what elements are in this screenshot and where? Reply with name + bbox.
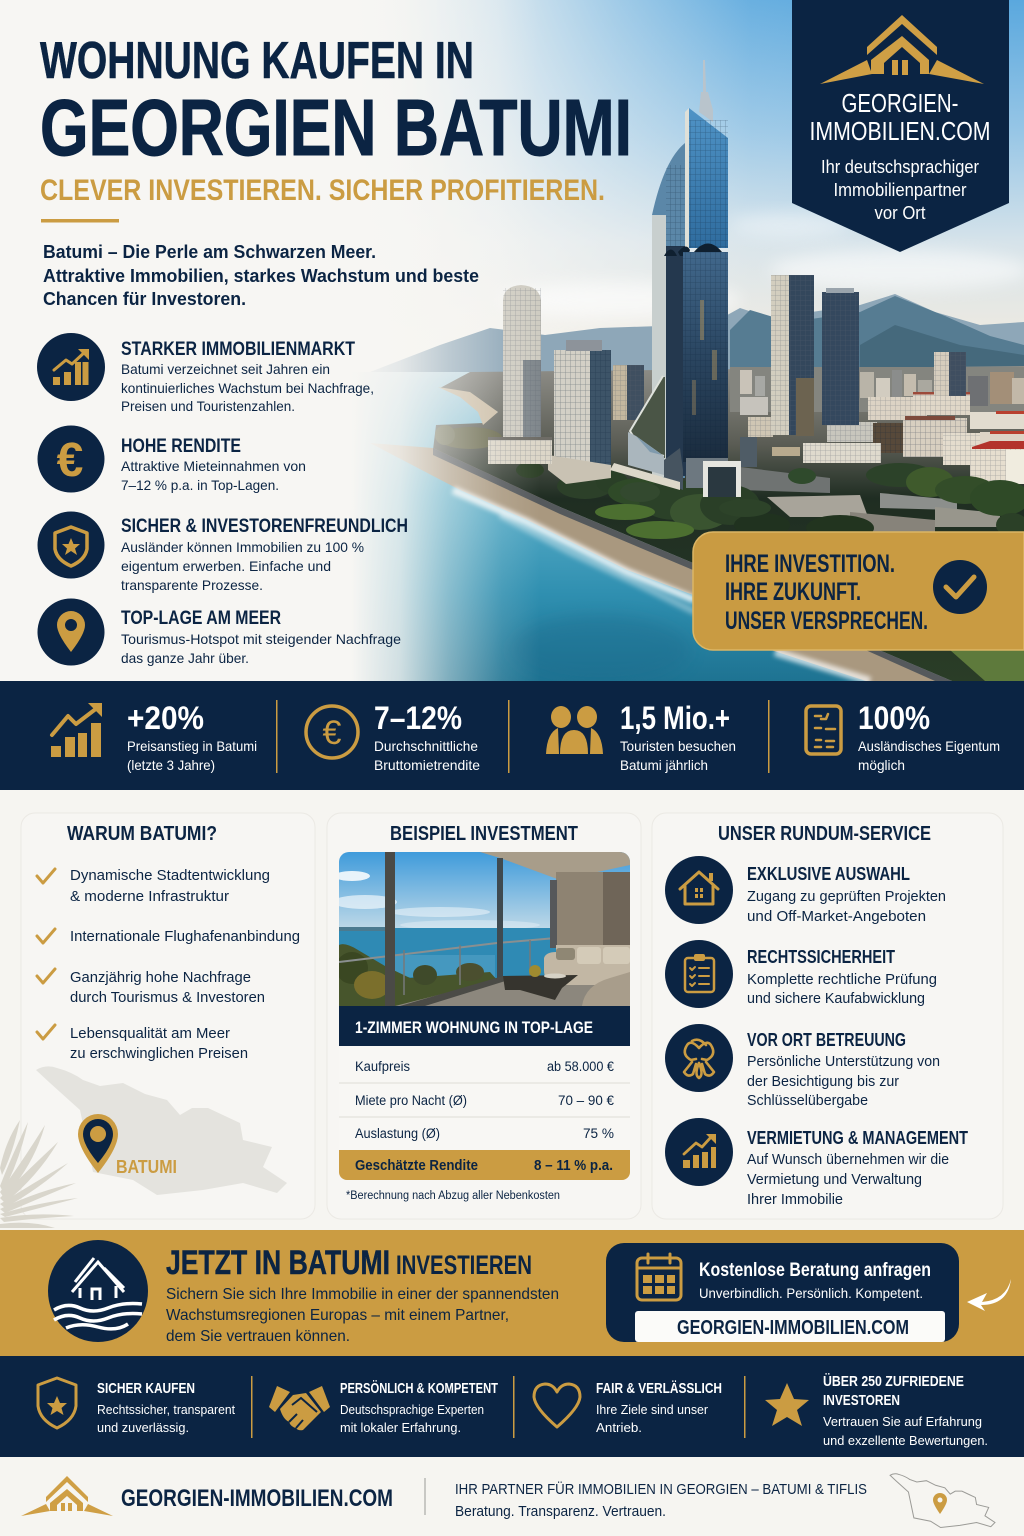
consultation button: Unverbindlich. Persönlich. Kompetent. [699, 1285, 923, 1301]
stat: yield: Bruttomietrendite [374, 757, 480, 773]
service: legal security: und sichere Kaufabwicklung [747, 991, 925, 1007]
hero photo: Batumi skyline and coast [362, 0, 1024, 681]
stat: tourists: Touristen besuchen [620, 738, 736, 754]
service: rental and management: Vermietung und Verwaltung [747, 1172, 922, 1188]
check list: Lebensqualität am Meer [70, 1025, 230, 1042]
trust: buy safely [38, 1378, 235, 1435]
logo banner: GEORGIEN- [842, 88, 958, 118]
stat: yield: 7–12% [374, 700, 462, 736]
icon: map pin [78, 1114, 118, 1173]
feature: Top-Lage am Meer: Tourismus-Hotspot mit steigender Nachfrage [121, 631, 401, 647]
stat: foreign ownership: 100% [858, 700, 930, 736]
trust: satisfied investors [765, 1373, 988, 1448]
icon: growth chart [37, 333, 105, 401]
stat: tourists [546, 700, 736, 773]
trust: personal: Deutschsprachige Experten [340, 1402, 484, 1417]
trust band [0, 1356, 1024, 1457]
trees [447, 427, 502, 449]
logo banner: IMMOBILIEN.COM [810, 116, 990, 146]
service: on-site support: VOR ORT BETREUUNG [747, 1030, 906, 1050]
stat: tourists: 1,5 Mio.+ [620, 700, 730, 736]
photo caption bar [339, 1006, 630, 1046]
check list: durch Tourismus & Investoren [70, 989, 265, 1006]
footer: IHR PARTNER FÜR IMMOBILIEN IN GEORGIEN – BATUMI & TIFLIS [455, 1480, 867, 1498]
highlighted row: expected yield: 8 – 11 % p.a. [534, 1158, 613, 1174]
trust: fair: Antrieb. [596, 1420, 642, 1435]
feature: starker Immobilienmarkt: STARKER IMMOBILIENMARKT [121, 339, 355, 360]
panel: Unser Rundum-Service: UNSER RUNDUM-SERVICE [718, 823, 931, 845]
call to action band: INVESTIEREN [396, 1250, 532, 1280]
title: WOHNUNG KAUFEN IN [40, 32, 474, 90]
panel: Warum Batumi [0, 813, 315, 1228]
check list: & moderne Infrastruktur [70, 888, 229, 905]
feature: starker Immobilienmarkt: Batumi verzeichnet seit Jahren ein [121, 361, 330, 377]
trust: satisfied investors: Vertrauen Sie auf Erfahrung [823, 1414, 982, 1429]
service: rental and management: VERMIETUNG & MANAGEMENT [747, 1128, 968, 1148]
service: exclusive selection [665, 856, 946, 925]
trust: buy safely: und zuverlässig. [97, 1420, 189, 1435]
title: GEORGIEN BATUMI [40, 83, 632, 172]
investment table: Miete pro Nacht (Ø) [355, 1093, 467, 1108]
highlighted row: expected yield [339, 1150, 630, 1180]
stat: price increase [51, 700, 257, 773]
towers [771, 275, 789, 435]
stat: foreign ownership [806, 700, 1000, 773]
service: on-site support: Persönliche Unterstützung von [747, 1054, 940, 1070]
intro text: Chancen für Investoren. [43, 288, 246, 309]
stat: yield: € [323, 714, 342, 752]
feature: hohe Rendite: Attraktive Mieteinnahmen von [121, 458, 306, 474]
feature: Top-Lage am Meer: das ganze Jahr über. [121, 650, 249, 666]
icon: calendar [637, 1254, 681, 1300]
trust: fair: Ihre Ziele sind unser [596, 1402, 709, 1417]
trust: satisfied investors: INVESTOREN [823, 1392, 900, 1409]
check list: Ganzjährig hohe Nachfrage [70, 969, 251, 986]
investment table: ab 58.000 € [547, 1059, 614, 1074]
panel: Warum Batumi: BATUMI [116, 1157, 177, 1177]
photo caption bar: 1-ZIMMER WOHNUNG IN TOP-LAGE [355, 1018, 593, 1037]
trust: buy safely: Rechtssicher, transparent [97, 1402, 235, 1417]
investment table [339, 1046, 630, 1180]
check list: Dynamische Stadtentwicklung [70, 867, 270, 884]
service: legal security: RECHTSSICHERHEIT [747, 947, 895, 967]
palm leaf decoration [0, 1120, 78, 1228]
panel: Unser Rundum-Service [652, 813, 1003, 1219]
icon: check [933, 560, 987, 614]
investment table: Auslastung (Ø) [355, 1126, 440, 1141]
feature: Top-Lage am Meer [38, 598, 401, 666]
logo banner: Ihr deutschsprachiger [821, 157, 979, 177]
feature: Top-Lage am Meer: TOP-LAGE AM MEER [121, 608, 281, 629]
check list: Internationale Flughafenanbindung [70, 928, 300, 945]
feature: hohe Rendite: 7–12 % p.a. in Top-Lagen. [121, 477, 279, 493]
stats band [0, 681, 1024, 790]
map of Georgia [36, 1066, 287, 1195]
callout: promise: IHRE INVESTITION. [725, 550, 895, 578]
consultation button: Kostenlose Beratung anfragen [699, 1259, 931, 1281]
trust: buy safely: SICHER KAUFEN [97, 1380, 195, 1397]
background city strip [730, 367, 1024, 412]
check list: zu erschwinglichen Preisen [70, 1045, 248, 1062]
trust: personal: mit lokaler Erfahrung. [340, 1420, 461, 1435]
stat: tourists: Batumi jährlich [620, 757, 708, 773]
icon: euro [38, 426, 104, 492]
trust: fair [534, 1380, 722, 1435]
footer: Beratung. Transparenz. Vertrauen. [455, 1504, 666, 1520]
panel: Beispiel Investment: BEISPIEL INVESTMENT [390, 823, 578, 845]
stat: price increase: Preisanstieg in Batumi [127, 738, 257, 754]
check list [37, 867, 300, 1062]
icon: shield with star [38, 512, 104, 578]
investment table: 70 – 90 € [558, 1093, 614, 1108]
feature: starker Immobilienmarkt: kontinuierliches Wachstum bei Nachfrage, [121, 380, 374, 396]
callout: promise: IHRE ZUKUNFT. [725, 578, 861, 606]
low-rise city blocks [740, 397, 768, 415]
stat: foreign ownership: Ausländisches Eigentum [858, 738, 1000, 754]
callout: promise: UNSER VERSPRECHEN. [725, 607, 928, 635]
feature: hohe Rendite [38, 426, 306, 493]
call to action band: dem Sie vertrauen können. [166, 1328, 350, 1345]
feature: hohe Rendite: HOHE RENDITE [121, 436, 241, 457]
feature: sicher und investorenfreundlich: transparente Prozesse. [121, 577, 263, 593]
trust: fair: FAIR & VERLÄSSLICH [596, 1380, 722, 1397]
investment table: 75 % [583, 1126, 614, 1141]
consultation button [606, 1243, 959, 1342]
service: on-site support: der Besichtigung bis zur [747, 1074, 899, 1090]
trust: personal: PERSÖNLICH & KOMPETENT [340, 1380, 498, 1397]
main glass tower [699, 60, 713, 122]
feature: sicher und investorenfreundlich [38, 512, 408, 593]
feature: sicher und investorenfreundlich: Ausländer können Immobilien zu 100 % [121, 539, 364, 555]
feature: sicher und investorenfreundlich: SICHER & INVESTORENFREUNDLICH [121, 516, 408, 537]
service: legal security: Komplette rechtliche Prüfung [747, 972, 937, 988]
subtitle: CLEVER INVESTIEREN. SICHER PROFITIEREN. [40, 174, 605, 207]
small map with pin [890, 1474, 995, 1528]
trust: satisfied investors: ÜBER 250 ZUFRIEDENE [823, 1373, 964, 1390]
investment table: Kaufpreis [355, 1059, 410, 1074]
call to action band [0, 1230, 1024, 1356]
website field [635, 1311, 945, 1342]
logo banner [792, 0, 1009, 252]
service: rental and management: Auf Wunsch übernehmen wir die [747, 1152, 949, 1168]
service: exclusive selection: EXKLUSIVE AUSWAHL [747, 864, 910, 884]
feature: sicher und investorenfreundlich: eigentum erwerben. Einfache und [121, 558, 331, 574]
title [40, 32, 632, 172]
panel: Warum Batumi: WARUM BATUMI? [67, 823, 217, 845]
call to action band: Sichern Sie sich Ihre Immobilie in einer der spannendsten [166, 1286, 559, 1303]
logo banner: Immobilienpartner [834, 180, 967, 200]
icon: location pin [38, 598, 104, 666]
stat: yield [306, 700, 480, 773]
intro text: Batumi – Die Perle am Schwarzen Meer. [43, 241, 376, 262]
intro text [43, 241, 479, 309]
icon: euro: € [57, 434, 83, 487]
trust: personal [269, 1380, 498, 1435]
white fade toward text column [0, 0, 540, 681]
panel: Beispiel Investment: *Berechnung nach Abzug aller Nebenkosten [346, 1190, 560, 1202]
call to action band: Wachstumsregionen Europas – mit einem Partner, [166, 1307, 509, 1324]
service: rental and management: Ihrer Immobilie [747, 1192, 843, 1208]
footer: GEORGIEN-IMMOBILIEN.COM [121, 1485, 393, 1512]
stat: price increase: +20% [127, 700, 204, 736]
panel: Beispiel Investment [327, 813, 641, 1219]
icon: house logo [820, 15, 984, 84]
service: exclusive selection: Zugang zu geprüften Projekten [747, 889, 946, 905]
footer [0, 1457, 1024, 1536]
service: on-site support [665, 1024, 940, 1109]
footer logo [21, 1476, 113, 1516]
stat: yield: Durchschnittliche [374, 738, 478, 754]
feature: starker Immobilienmarkt: Preisen und Touristenzahlen. [121, 398, 295, 414]
service: rental and management [665, 1118, 968, 1208]
logo banner: vor Ort [874, 203, 926, 223]
stat: price increase: (letzte 3 Jahre) [127, 757, 215, 773]
service: on-site support: Schlüsselübergabe [747, 1093, 868, 1109]
highlighted row: expected yield: Geschätzte Rendite [355, 1158, 478, 1174]
call to action band: JETZT IN BATUMI [166, 1244, 390, 1282]
trust: satisfied investors: und exzellente Bewertungen. [823, 1433, 988, 1448]
arrow to button [967, 1279, 1011, 1311]
icon: house on waves [48, 1240, 148, 1342]
intro text: Attraktive Immobilien, starkes Wachstum und beste [43, 265, 479, 286]
callout: promise [693, 532, 1024, 650]
feature: starker Immobilienmarkt [37, 333, 374, 414]
service: exclusive selection: und Off-Market-Angeboten [747, 909, 926, 925]
low roofs [740, 467, 830, 493]
website field: GEORGIEN-IMMOBILIEN.COM [677, 1317, 909, 1339]
service: legal security [665, 940, 937, 1008]
apartment balcony photo [333, 852, 630, 1006]
stat: foreign ownership: möglich [858, 757, 905, 773]
